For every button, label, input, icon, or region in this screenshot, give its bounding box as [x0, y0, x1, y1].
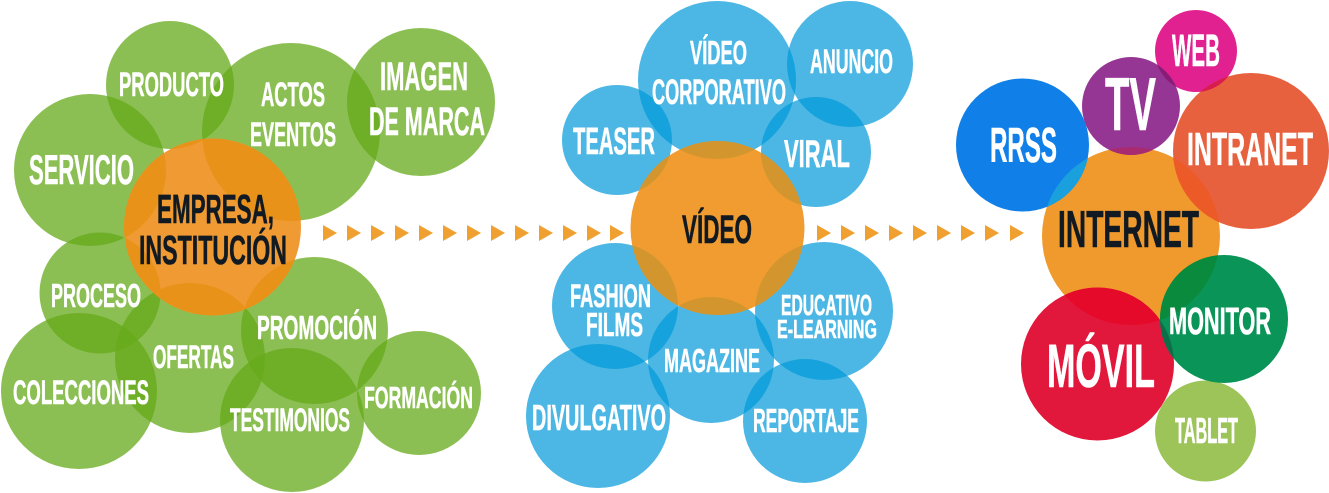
overlap: tv and internet [1109, 147, 1153, 155]
overlap: monitor and movil [1160, 320, 1174, 359]
arrow row: video to internet [817, 225, 1024, 241]
label: films: FILMS [586, 306, 643, 343]
label: video line: VÍDEO [690, 34, 747, 71]
panel: internet cluster: TABLET [1175, 410, 1238, 451]
label: divulgativo: DIVULGATIVO [532, 397, 666, 438]
central circle: empresa [124, 138, 301, 316]
panel: video cluster [526, 1, 913, 488]
circle: rrss [956, 78, 1089, 212]
label: de marca: DE MARCA [369, 100, 485, 144]
label: educativo: EDUCATIVO [781, 290, 872, 322]
central circle: video [630, 141, 804, 315]
panel: empresa cluster [1, 21, 495, 492]
blue circles [526, 1, 913, 488]
overlap: movil and internet [1064, 288, 1160, 325]
label: servicio: SERVICIO [29, 146, 134, 193]
overlap: intranet and web [1200, 76, 1228, 92]
label: anuncio: ANUNCIO [810, 43, 893, 81]
label: magazine: MAGAZINE [664, 342, 760, 379]
circle: monitor [1160, 255, 1288, 383]
label: fashion: FASHION [570, 278, 651, 314]
label: formacion: FORMACIÓN [364, 379, 473, 415]
label: institucion: INSTITUCIÓN [139, 227, 287, 273]
label: reportaje: REPORTAJE [753, 402, 859, 439]
arrow row: empresa to video [323, 225, 624, 241]
circle: web [1155, 10, 1237, 92]
label: tv: TV [1105, 62, 1156, 146]
overlap: monitor and internet [1160, 255, 1218, 320]
label: internet: INTERNET [1058, 201, 1199, 259]
label: eventos: EVENTOS [250, 116, 336, 154]
label: movil: MÓVIL [1047, 332, 1155, 400]
label: corporativo: CORPORATIVO [652, 73, 786, 112]
circle: tablet [1155, 380, 1256, 482]
label: actos: ACTOS [261, 76, 325, 114]
overlap: rrss and internet [1047, 158, 1088, 207]
label: producto: PRODUCTO [119, 66, 224, 104]
label: proceso: PROCESO [51, 277, 141, 314]
overlap: tv and web [1157, 64, 1176, 87]
label: video center: VÍDEO [682, 207, 752, 252]
label: viral: VIRAL [784, 133, 850, 176]
label: teaser: TEASER [573, 121, 655, 163]
panel: internet cluster: WEB [1172, 25, 1220, 76]
label: empresa: EMPRESA, [157, 186, 274, 232]
label: e-learning: E-LEARNING [777, 314, 877, 344]
circle: intranet [1173, 73, 1329, 229]
label: promocion: PROMOCIÓN [257, 309, 377, 346]
label: colecciones: COLECCIONES [13, 374, 149, 412]
circle: internet [1042, 147, 1220, 325]
label: imagen: IMAGEN [380, 55, 468, 99]
panel: internet cluster [956, 10, 1329, 482]
label: ofertas: OFERTAS [153, 339, 234, 375]
green circles [1, 21, 495, 492]
circle: movil [1021, 288, 1174, 440]
label: testimonios: TESTIMONIOS [230, 402, 350, 438]
overlap: intranet and internet [1173, 158, 1219, 222]
circle: tv [1082, 57, 1180, 155]
panel: internet cluster: RRSS [990, 119, 1057, 173]
